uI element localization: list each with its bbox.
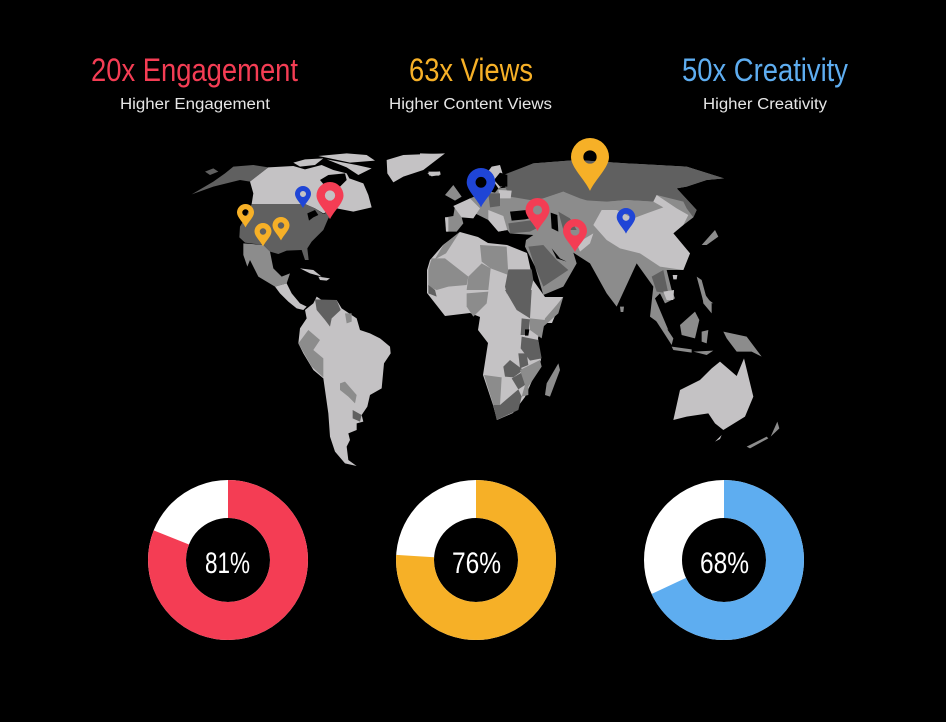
- stat heading: creativity: 50x Creativity: [682, 52, 848, 88]
- stat heading: views: [389, 52, 552, 113]
- world map: [192, 153, 779, 466]
- pin: blue Canada: [295, 186, 311, 208]
- map: Eurasia: [420, 153, 724, 330]
- donut chart: 76%: 76%: [452, 547, 501, 580]
- pin: red Turkey: [526, 198, 550, 231]
- pin: yellow US central: [272, 217, 290, 240]
- stat heading: engagement: Higher Engagement: [120, 96, 271, 113]
- donut chart: 76%: [415, 499, 537, 621]
- donut chart: 68%: 68%: [700, 547, 749, 580]
- stat heading: engagement: 20x Engagement: [91, 52, 298, 88]
- pin: yellow US south: [254, 223, 272, 246]
- stat heading: creativity: Higher Creativity: [703, 96, 827, 113]
- pin: red New York: [316, 182, 344, 219]
- stat heading: engagement: [91, 52, 298, 113]
- pin: yellow Russia: [571, 138, 609, 191]
- stat heading: creativity: [682, 52, 848, 113]
- map: Africa: [427, 232, 563, 420]
- pin: blue China: [617, 208, 635, 234]
- map: North America: [192, 153, 445, 310]
- pin: red Iran: [563, 219, 587, 252]
- donut chart: 81%: 81%: [205, 547, 250, 580]
- pin: blue Europe: [467, 168, 495, 207]
- map: Oceania: [652, 290, 779, 448]
- donut chart: 81%: [167, 499, 289, 621]
- pin: yellow US west: [237, 204, 254, 227]
- donut chart: 68%: [663, 499, 785, 621]
- map: South America: [298, 297, 391, 466]
- stat heading: views: 63x Views: [409, 52, 533, 88]
- stat heading: views: Higher Content Views: [389, 96, 552, 113]
